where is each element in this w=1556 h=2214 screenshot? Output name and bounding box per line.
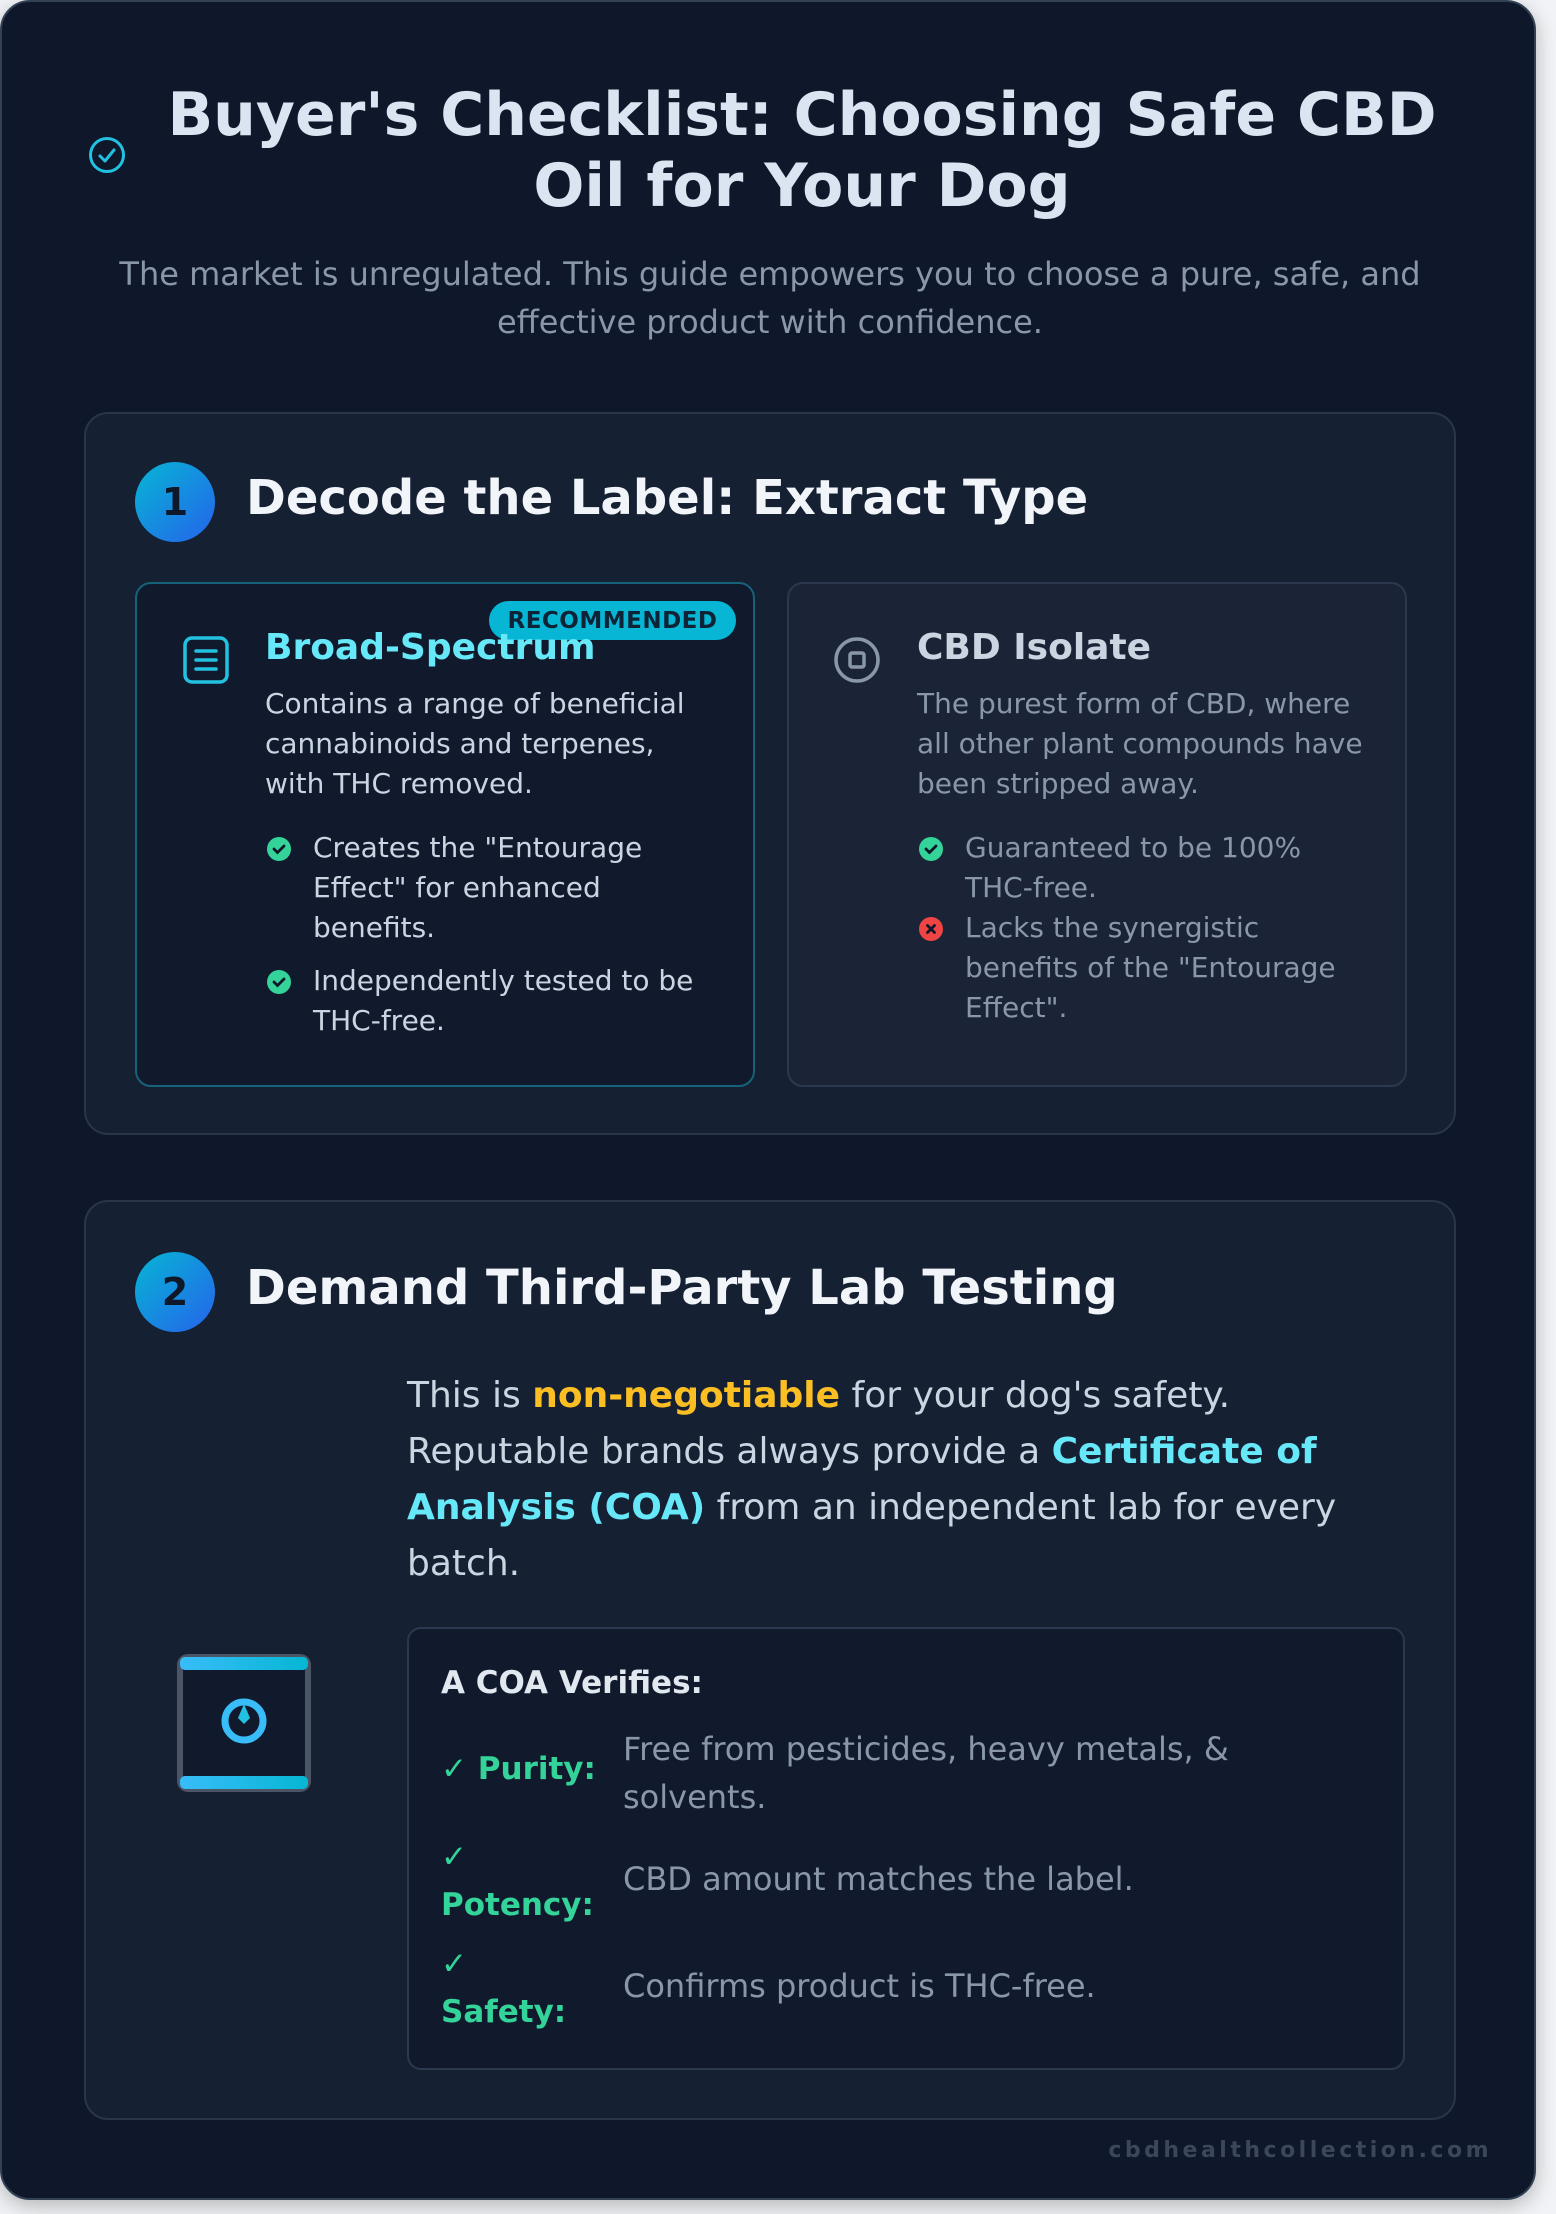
icon: lab certificate (177, 1654, 311, 1792)
row: safety: Safety: (441, 1994, 566, 2030)
step number 1: 1 (162, 480, 188, 524)
description: The purest form of CBD, where all other plant compounds have been stripped away. (917, 687, 1363, 800)
icon: isolate (834, 637, 880, 683)
row: potency (441, 1839, 1134, 1923)
title: Buyer's Checklist: Choosing Safe CBD (167, 80, 1437, 150)
card: broad-spectrum (135, 582, 755, 1087)
bullet: tested: Independently tested to be THC-free. (313, 964, 693, 1037)
card: isolate (787, 582, 1407, 1087)
icon: document (183, 636, 229, 684)
bullet: entourage: Creates the "Entourage Effect" for enhanced benefits. (313, 831, 642, 944)
row: purity: ✓ Purity: (441, 1751, 596, 1787)
row: safety (441, 1946, 1096, 2030)
bullet: thc-free: Guaranteed to be 100% THC-free. (965, 831, 1301, 904)
row: potency: CBD amount matches the label. (623, 1860, 1134, 1898)
step number 2: 2 (162, 1270, 188, 1314)
panel: extract type (84, 412, 1456, 1135)
panel: lab testing (84, 1200, 1456, 2120)
step number 2 (135, 1252, 215, 1332)
row: potency: ✓ (441, 1839, 467, 1875)
card title: CBD Isolate (917, 627, 1151, 668)
heading: lab testing: Demand Third-Party Lab Testing (246, 1260, 1118, 1316)
badge: recommended (489, 601, 736, 640)
footer: source: cbdhealthcollection.com (1108, 2138, 1492, 2163)
row: safety: ✓ (441, 1946, 467, 1982)
bullet: lacks entourage: Lacks the synergistic benefits of the "Entourage Effect". (965, 911, 1336, 1024)
subtitle: effective product with confidence. (497, 303, 1043, 341)
row: purity: Free from pesticides, heavy metals, & solvents. (623, 1730, 1229, 1816)
paragraph: This is non-negotiable for your dog's safety. Reputable brands always provide a Certificate of Analysis (COA) from an independent lab for every batch. (407, 1375, 1336, 1584)
row: potency: Potency: (441, 1887, 594, 1923)
subtitle (119, 255, 1421, 341)
step number 1 (135, 462, 215, 542)
icon: title check (89, 137, 125, 173)
badge: recommended: RECOMMENDED (508, 608, 717, 634)
subtitle: The market is unregulated. This guide empowers you to choose a pure, safe, and (119, 255, 1421, 293)
title: Oil for Your Dog (533, 151, 1071, 221)
description: Contains a range of beneficial cannabinoids and terpenes, with THC removed. (265, 687, 685, 800)
title (167, 80, 1437, 221)
box heading: A COA Verifies: (441, 1665, 703, 1701)
row: safety: Confirms product is THC-free. (623, 1967, 1096, 2005)
heading: decode the label: Decode the Label: Extract Type (246, 470, 1088, 526)
card title: Broad-Spectrum (265, 627, 596, 668)
box: COA verifies (407, 1627, 1405, 2070)
